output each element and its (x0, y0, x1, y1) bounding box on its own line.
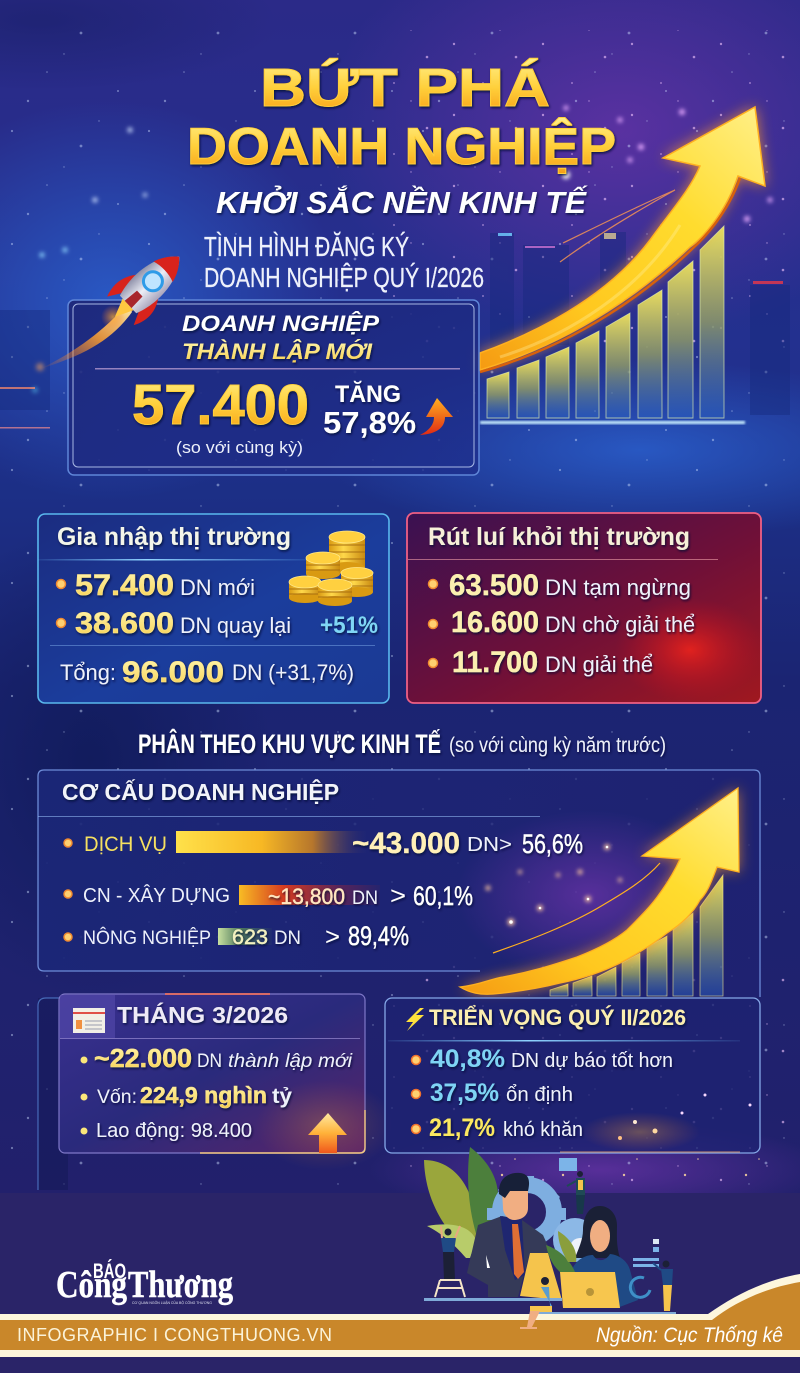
logo: báo công thương: Thương (128, 1264, 233, 1306)
heading: THÁNG 3/2026 (117, 1001, 288, 1028)
item: vốn: 224,9 nghìn (140, 1082, 267, 1108)
change label: TĂNG (335, 380, 401, 408)
label line 1: DOANH NGHIỆP (182, 311, 379, 336)
row: dịch vụ: 56,6% (522, 829, 583, 859)
item: vốn: tỷ (272, 1085, 292, 1108)
streak lines (560, 190, 675, 262)
small person: right with chart (630, 1239, 673, 1311)
section heading: phân theo khu vực kinh tế: (so với cùng kỳ năm trước) (449, 734, 666, 757)
heading: TRIỂN VỌNG QUÝ II/2026 (429, 1005, 686, 1030)
row: nông nghiệp: NÔNG NGHIỆP (83, 927, 211, 949)
sparkles (560, 1094, 752, 1152)
row: cn - xây dựng: DN (352, 888, 378, 909)
icon: up arrow (308, 1113, 347, 1153)
leaves (424, 1160, 478, 1258)
total: DN (+31,7%) (232, 660, 354, 685)
heading: Gia nhập thị trường (57, 523, 291, 551)
row: cn - xây dựng: CN - XÂY DỰNG (83, 884, 230, 907)
panel: doanh nghiệp thành lập mới (68, 300, 479, 475)
row: nông nghiệp: 89,4% (348, 921, 409, 951)
item: 57.400: DN mới (180, 575, 255, 600)
item: 37,5%: 37,5% (430, 1079, 499, 1107)
footer band (0, 1274, 800, 1357)
heading: tình hình đăng ký: TÌNH HÌNH ĐĂNG KÝ (204, 231, 409, 262)
panel: triển vọng quý ii/2026 (385, 998, 760, 1153)
icon: gold coins (289, 531, 373, 606)
row: cn - xây dựng: > (390, 882, 406, 910)
item: 37,5%: ổn định (506, 1084, 573, 1106)
gears (500, 1185, 554, 1239)
item: 16.600: 16.600 (451, 606, 539, 639)
footer: site label: INFOGRAPHIC I CONGTHUONG.VN (17, 1325, 332, 1345)
back outline (38, 998, 68, 1190)
item: 21,7%: khó khăn (503, 1119, 583, 1141)
logo: báo công thương: CƠ QUAN NGÔN LUẬN CỦA BỘ CÔNG THƯƠNG (132, 1300, 212, 1305)
illustration: business team (424, 1147, 676, 1315)
desks (424, 1298, 676, 1315)
item: 40,8%: 40,8% (430, 1045, 505, 1073)
row: nông nghiệp (64, 921, 409, 951)
item: 38.600 (56, 607, 378, 640)
item: 57.400 (56, 569, 255, 602)
panel: cơ cấu doanh nghiệp (38, 770, 760, 997)
item: 21,7% (412, 1114, 583, 1142)
item: 37,5% (412, 1079, 573, 1107)
item: 16.600: DN chờ giải thể (545, 612, 695, 637)
row: dịch vụ: ~43.000 (352, 827, 460, 860)
man (467, 1173, 552, 1297)
front leaves (546, 1245, 575, 1272)
sparkles (486, 844, 622, 926)
row: nông nghiệp: 623 (232, 926, 268, 949)
panel: tháng 3/2026 (59, 994, 395, 1170)
panel: gia nhập thị trường (38, 514, 389, 703)
heading: CƠ CẤU DOANH NGHIỆP (62, 778, 339, 805)
logo: báo công thương: BÁO (93, 1260, 126, 1283)
woman (571, 1206, 638, 1308)
item: thành lập mới: thành lập mới (228, 1051, 353, 1072)
icon: red up arrow (420, 398, 453, 435)
floor glow line (480, 421, 745, 424)
item: lao động: Lao động: 98.400 (96, 1120, 252, 1142)
item: 38.600: +51% (320, 612, 378, 639)
panel: rút lui khỏi thị trường (407, 513, 765, 703)
item: 11.700: DN giải thể (545, 652, 653, 677)
value: 57.400 (132, 373, 309, 437)
small person: seated woman (530, 1277, 552, 1312)
footer: source: Nguồn: Cục Thống kê (596, 1324, 783, 1347)
item: 21,7%: 21,7% (429, 1114, 495, 1142)
item: 63.500: DN tạm ngừng (545, 575, 691, 600)
small person: top with note (559, 1158, 585, 1214)
subtitle: KHỞI SẮC NỀN KINH TẾ (216, 184, 588, 220)
heading: Rút luí khỏi thị trường (428, 523, 690, 551)
row: nông nghiệp: > (325, 923, 340, 951)
comparison note: (so với cùng kỳ) (176, 438, 303, 457)
total: 96.000 (122, 656, 224, 689)
row: nông nghiệp: DN (274, 928, 301, 949)
item: 40,8% (412, 1045, 673, 1073)
title line: doanh nghiệp: DOANH NGHIỆP (187, 117, 616, 176)
total: Tổng: (60, 660, 116, 685)
title line: bứt phá: BỨT PHÁ (260, 58, 550, 118)
icon: rocket (40, 240, 195, 369)
city skyline (0, 232, 790, 428)
growth arrow (460, 788, 739, 996)
item: thành lập mới: ~22.000 (94, 1043, 192, 1073)
title (187, 58, 616, 176)
item: 11.700 (428, 646, 653, 679)
item: 38.600: DN quay lại (180, 613, 291, 638)
item: 11.700: 11.700 (452, 646, 538, 679)
seated woman legs over band (520, 1311, 540, 1329)
row: dịch vụ: DỊCH VỤ (84, 833, 167, 856)
item: vốn (80, 1082, 292, 1108)
small person: left with ladder (435, 1226, 465, 1297)
laptops (520, 1253, 562, 1300)
row: cn - xây dựng: ~13,800 (268, 884, 345, 909)
item: 16.600 (428, 606, 695, 639)
row: dịch vụ (64, 827, 583, 860)
item: 63.500 (428, 569, 691, 602)
item: 40,8%: DN dự báo tốt hơn (511, 1050, 673, 1072)
bars (487, 226, 724, 418)
growth arrow with bars (480, 107, 765, 424)
item: 38.600: 38.600 (75, 607, 174, 640)
solid footer background (0, 1193, 800, 1373)
total (60, 656, 354, 689)
item: thành lập mới: DN (197, 1051, 222, 1072)
heading: tình hình đăng ký: DOANH NGHIỆP QUÝ I/2026 (204, 262, 484, 293)
item: thành lập mới (80, 1043, 353, 1073)
change value: 57,8% (323, 405, 416, 440)
heading: tình hình đăng ký (204, 231, 484, 293)
label line 2: THÀNH LẬP MỚI (182, 339, 373, 364)
arrow shape (480, 107, 765, 370)
item: vốn: Vốn: (97, 1087, 137, 1108)
icon: lightning (406, 1008, 424, 1031)
logo: báo công thương (56, 1260, 233, 1306)
row: cn - xây dựng (64, 881, 473, 911)
section heading: phân theo khu vực kinh tế: PHÂN THEO KHU VỰC KINH TẾ (138, 728, 441, 759)
item: 63.500: 63.500 (449, 569, 539, 602)
row: dịch vụ: DN> (467, 834, 512, 856)
row: cn - xây dựng: 60,1% (413, 881, 473, 911)
icon: calendar (60, 995, 115, 1038)
logo: báo công thương: Công (56, 1264, 127, 1306)
item: 57.400: 57.400 (75, 569, 174, 602)
arrow glow (480, 107, 765, 370)
